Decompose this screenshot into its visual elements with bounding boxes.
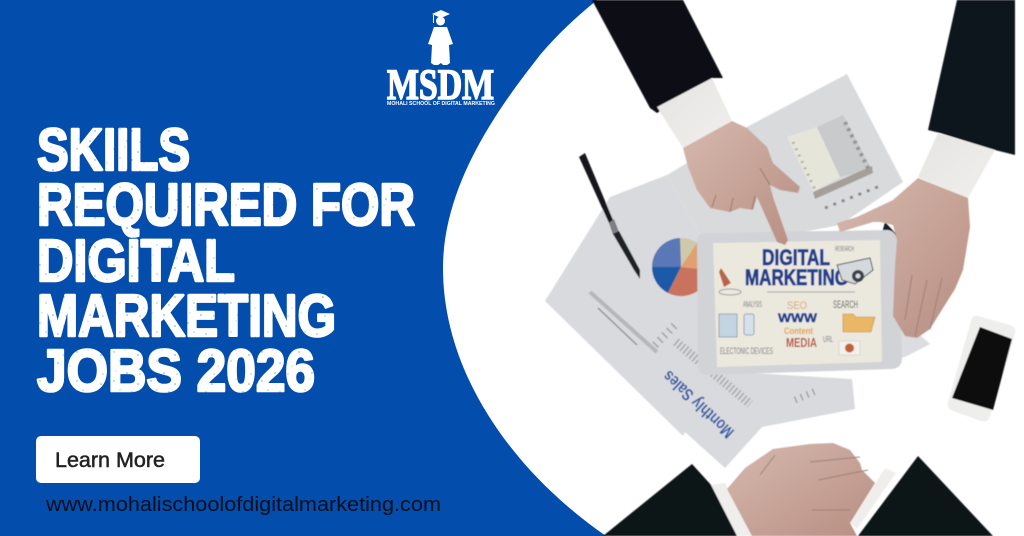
monthly sales label: Monthly Sales (659, 367, 738, 442)
screen labels: WWW (778, 311, 818, 325)
pointing hand (683, 121, 800, 245)
tablet (697, 222, 902, 375)
smartphone (948, 316, 1015, 421)
screen title: DIGITAL (762, 245, 830, 270)
cuff (657, 78, 732, 148)
photo: team around tablet (545, 0, 1015, 536)
left cuff (711, 483, 752, 536)
right cuff (850, 468, 896, 529)
heading: MARKETING (37, 283, 336, 349)
screen labels: MEDIA (786, 335, 817, 350)
screen title (745, 245, 848, 290)
heading: DIGITAL (37, 228, 235, 294)
bottom arms and clasped hands (603, 443, 993, 536)
logo wordmark: MSDM (387, 62, 494, 109)
pie chart (652, 238, 710, 296)
top left arm (592, 0, 800, 245)
screen labels: Content (784, 326, 813, 336)
website address: www.mohalischoolofdigitalmarketing.com (45, 494, 441, 516)
heading (37, 117, 415, 404)
screen labels: ELECTONIC DEVICES (720, 346, 773, 356)
heading: JOBS 2026 (37, 338, 315, 404)
screen title: MARKETING (745, 265, 848, 290)
MSDM logo (387, 10, 495, 109)
learn more button: Learn More (55, 449, 165, 472)
screen labels (720, 246, 858, 356)
sleeve (592, 0, 723, 113)
sleeve (928, 0, 1015, 155)
icon: graduate figure (428, 10, 453, 65)
left sleeve (603, 464, 752, 536)
right paper corner (880, 300, 930, 365)
heading: REQUIRED FOR (37, 172, 415, 238)
screen labels: URL (823, 335, 833, 344)
learn more button (36, 436, 200, 483)
back paper with table (667, 74, 903, 240)
tablet screen (713, 240, 882, 367)
logo tagline: MOHALI SCHOOL OF DIGITAL MARKETING (387, 101, 495, 107)
screen labels: SEO (787, 300, 807, 312)
screen labels: RESEARCH (835, 246, 854, 253)
cuff (918, 133, 995, 198)
screen icons (719, 258, 875, 355)
monthly sales paper (545, 175, 855, 468)
screen labels: SEARCH (833, 299, 858, 311)
heading: SKIILS (37, 117, 190, 183)
clasped hands (727, 443, 875, 536)
right sleeve (858, 456, 993, 536)
top right arm (837, 0, 1015, 338)
pen (579, 153, 640, 279)
screen labels: ANALYSIS (743, 300, 762, 309)
hand on tablet (837, 178, 970, 338)
blue background panel (0, 0, 606, 536)
